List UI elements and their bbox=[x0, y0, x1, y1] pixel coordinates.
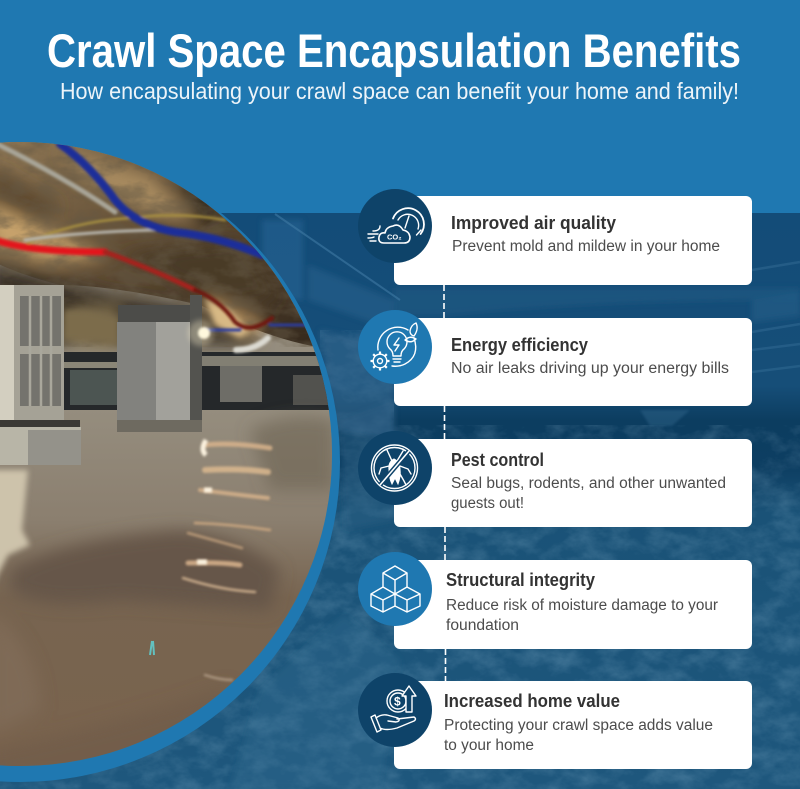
icon circle: air quality gauge and CO2 cloud: CO₂ bbox=[387, 232, 402, 242]
crawl space photo in circle bbox=[0, 130, 354, 780]
icon circle: hand, coin and arrow bbox=[358, 673, 432, 747]
dashed connector line bbox=[444, 285, 446, 681]
heading: Increased home value bbox=[444, 691, 620, 711]
heading: Pest control bbox=[451, 450, 544, 470]
card: increased home value bbox=[358, 673, 752, 769]
description: Protecting your crawl space adds value bbox=[444, 717, 713, 734]
heading: Improved air quality bbox=[451, 213, 616, 233]
card: structural integrity bbox=[358, 552, 752, 649]
left equipment unit bbox=[0, 285, 81, 465]
icon circle: air quality gauge and CO2 cloud bbox=[358, 189, 432, 263]
description: guests out! bbox=[451, 495, 524, 512]
heading: Structural integrity bbox=[446, 570, 595, 590]
card: energy efficiency bbox=[358, 310, 752, 406]
background: darkened crawl space photo bbox=[0, 213, 800, 789]
description bbox=[451, 475, 726, 512]
description: Prevent mold and mildew in your home bbox=[452, 238, 720, 255]
blue ring around photo bbox=[0, 142, 340, 782]
heading: Energy efficiency bbox=[451, 335, 588, 355]
description: Reduce risk of moisture damage to your bbox=[446, 597, 718, 614]
description bbox=[446, 597, 718, 634]
cables and pipes bbox=[0, 143, 310, 350]
icon circle: hand, coin and arrow: $ bbox=[394, 694, 401, 708]
support column bbox=[117, 295, 202, 432]
description: Seal bugs, rodents, and other unwanted bbox=[451, 475, 726, 492]
icon circle: light bulb, gear and leaf bbox=[358, 310, 432, 384]
description bbox=[444, 717, 713, 754]
icon circle: stacked cubes bbox=[358, 552, 432, 626]
insulation drape bbox=[64, 310, 118, 345]
header band bbox=[0, 0, 800, 214]
card: improved air quality bbox=[358, 189, 752, 285]
icon circle: crossed-out insect bbox=[358, 431, 432, 505]
floor reflections bbox=[0, 417, 335, 780]
subtitle: How encapsulating your crawl space can benefit your home and family! bbox=[60, 78, 739, 104]
description: No air leaks driving up your energy bills bbox=[451, 360, 729, 377]
back wall bbox=[64, 352, 354, 410]
ceiling insulation bbox=[0, 142, 313, 346]
description: foundation bbox=[446, 617, 519, 634]
description: to your home bbox=[444, 737, 534, 754]
card: pest control bbox=[358, 431, 752, 527]
